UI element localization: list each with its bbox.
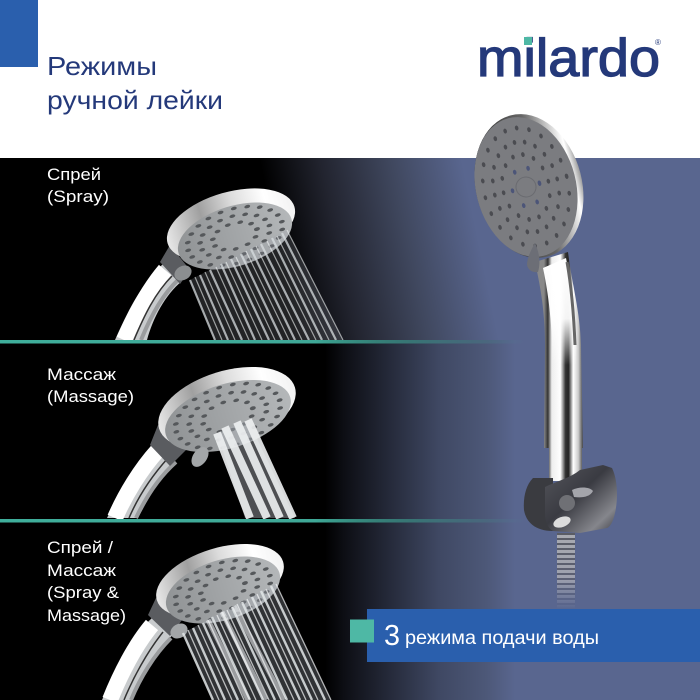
water jets fine xyxy=(188,584,331,700)
banner text: режима подачи воды xyxy=(405,628,599,649)
wall holder back xyxy=(524,478,553,531)
handle xyxy=(115,260,182,340)
mode labels: Массаж xyxy=(47,561,117,580)
wall holder body xyxy=(545,465,617,533)
title xyxy=(47,51,223,115)
mode labels: (Spray & xyxy=(47,583,120,602)
head rim xyxy=(459,102,599,270)
teal square marker xyxy=(350,620,374,642)
mode labels: Спрей / xyxy=(47,538,113,557)
shower 3: spray and massage mode xyxy=(102,530,331,700)
spray face xyxy=(170,190,300,282)
handle xyxy=(535,252,583,448)
head face xyxy=(460,106,592,268)
mode labels: Массаж xyxy=(47,365,117,384)
head lever xyxy=(527,243,539,272)
banner bar xyxy=(367,609,700,662)
water jets xyxy=(190,233,336,340)
logo: milardo: milardo xyxy=(477,29,660,88)
mode labels xyxy=(47,165,134,625)
water jets xyxy=(183,586,325,700)
handle upper highlight xyxy=(543,258,576,365)
lever xyxy=(188,444,212,470)
hose xyxy=(557,533,575,609)
massage face xyxy=(156,366,300,466)
combined face xyxy=(158,544,288,636)
product: hand shower on holder xyxy=(459,102,617,609)
mode labels: (Spray) xyxy=(47,187,109,206)
divider line 2 xyxy=(0,519,525,522)
holder screw xyxy=(552,514,572,530)
holder highlight xyxy=(572,487,593,497)
neck xyxy=(150,425,188,466)
chrome rim xyxy=(147,530,293,632)
water haze xyxy=(190,230,343,340)
massage streams xyxy=(208,606,284,700)
neck xyxy=(549,447,582,481)
lever xyxy=(168,620,190,642)
lever xyxy=(172,262,194,284)
banner number: 3 xyxy=(384,620,400,652)
divider line 1 xyxy=(0,340,525,344)
massage jets xyxy=(217,420,293,518)
shower 1: spray mode xyxy=(115,175,343,340)
neck xyxy=(148,598,182,636)
water haze xyxy=(183,584,331,700)
white header band xyxy=(0,0,700,158)
holder knob xyxy=(559,495,575,511)
chrome rim xyxy=(158,175,304,275)
shower 2: massage mode xyxy=(107,352,306,518)
title: Режимы xyxy=(47,51,157,81)
mode labels: Massage) xyxy=(47,606,126,625)
handle xyxy=(102,617,175,700)
banner xyxy=(350,609,700,662)
chrome rim xyxy=(148,352,306,464)
neck xyxy=(160,245,190,284)
blue corner block xyxy=(0,0,38,67)
title: ручной лейки xyxy=(47,85,223,115)
mode labels: (Massage) xyxy=(47,387,134,406)
dark-to-blue background: lower panels xyxy=(0,340,700,700)
water haze xyxy=(217,420,295,518)
mode labels: Спрей xyxy=(47,165,101,184)
handle right band xyxy=(567,262,575,345)
dark-to-blue background: upper panel xyxy=(0,158,700,340)
logo: milardo: ® xyxy=(655,38,661,47)
handle xyxy=(107,446,182,518)
water jets fine xyxy=(195,230,343,340)
